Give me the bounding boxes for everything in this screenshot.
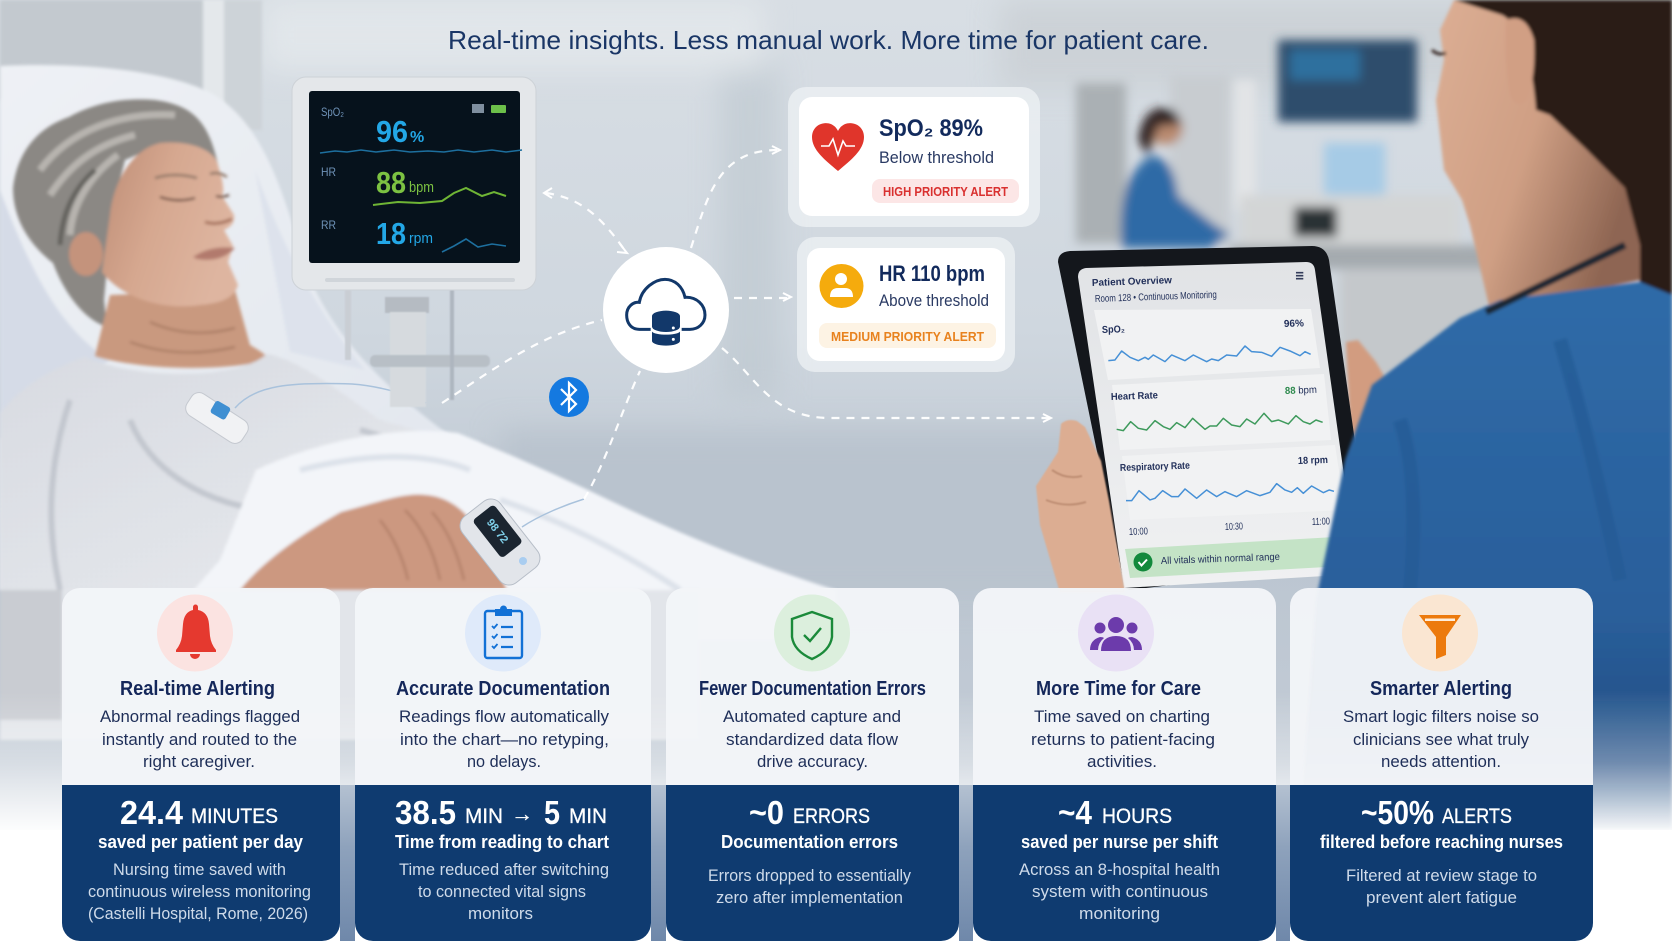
tablet <box>1058 246 1372 590</box>
panel: smarter alerting <box>1290 588 1593 941</box>
tablet labels: Patient Overview <box>1092 275 1172 289</box>
panel: accurate documentation: → <box>511 803 533 826</box>
tablet labels: 10:30 <box>1225 521 1243 533</box>
panel: accurate documentation: Readings flow automatically <box>399 707 609 726</box>
tablet labels: 11:00 <box>1312 516 1330 528</box>
panel: accurate documentation: 38.5 <box>395 794 456 831</box>
monitor readings: SpO₂ <box>321 105 344 119</box>
panel: more time for care: saved per nurse per shift <box>1021 832 1218 852</box>
photo: patient in bed <box>0 65 836 740</box>
icon: red heart with pulse <box>812 123 864 171</box>
panel: more time for care: HOURS <box>1102 805 1172 828</box>
alert card: HR medium priority: HR 110 bpm <box>879 261 985 286</box>
face <box>102 142 238 306</box>
monitor readings: % <box>410 129 424 146</box>
panel: real-time alerting: right caregiver. <box>143 752 255 771</box>
nurse left hand <box>1036 420 1125 593</box>
tablet labels <box>1092 275 1330 572</box>
panel: smarter alerting: filtered before reaching nurses <box>1320 832 1563 852</box>
panel: fewer documentation errors: Errors dropped to essentially <box>708 866 911 885</box>
icon: shield check <box>774 594 850 672</box>
panel: real-time alerting: MINUTES <box>191 805 278 828</box>
panel: more time for care: Time saved on charting <box>1034 707 1210 726</box>
panel: accurate documentation: Accurate Documentation <box>396 678 610 700</box>
bluetooth badge <box>549 377 589 417</box>
hair <box>13 99 218 327</box>
panel: real-time alerting: (Castelli Hospital, Rome, 2026) <box>88 904 308 923</box>
tablet labels: All vitals within normal range <box>1161 552 1280 567</box>
panel: more time for care: ~4 <box>1058 794 1093 831</box>
tablet labels: 88 bpm <box>1285 385 1317 397</box>
tablet labels: 96% <box>1284 318 1304 330</box>
panel: more time for care <box>973 588 1276 941</box>
photo: nurse holding tablet <box>1036 0 1672 830</box>
panel: more time for care: monitoring <box>1079 904 1160 923</box>
panel: more time for care: More Time for Care <box>1036 678 1201 700</box>
panel: more time for care: returns to patient-facing <box>1031 730 1215 749</box>
tablet labels: SpO₂ <box>1102 324 1125 336</box>
tablet labels: Respiratory Rate <box>1120 461 1190 474</box>
panel: real-time alerting: saved per patient per day <box>98 832 303 852</box>
panel: fewer documentation errors: drive accuracy. <box>757 752 868 771</box>
tagline heading: Real-time insights. Less manual work. More time for patient care. <box>448 25 1209 55</box>
ear <box>69 232 103 276</box>
monitor readings: 96 <box>376 114 408 149</box>
nurse right-hand fingers <box>1346 340 1398 460</box>
panel: smarter alerting: prevent alert fatigue <box>1366 888 1517 907</box>
nurse scrubs <box>1300 282 1672 830</box>
panel: fewer documentation errors: Documentation errors <box>721 832 898 852</box>
forearm and hand <box>240 494 507 590</box>
panel: more time for care: activities. <box>1087 752 1157 771</box>
icon: funnel <box>1402 594 1478 672</box>
thin sensor wires <box>235 383 584 527</box>
chest sensor <box>182 389 252 447</box>
panel: real-time alerting: instantly and routed to the <box>102 730 297 749</box>
panel: accurate documentation: 5 <box>544 794 560 831</box>
blurred colleague and ward behind <box>1076 40 1530 380</box>
monitor readings: 18 <box>376 216 406 251</box>
panel: fewer documentation errors: zero after implementation <box>716 888 903 907</box>
panel: smarter alerting: Smarter Alerting <box>1370 678 1512 700</box>
panel: more time for care: system with continuous <box>1032 882 1208 901</box>
alert card: SpO2 high priority: Below threshold <box>879 148 994 167</box>
alert card: HR medium priority <box>797 237 1015 372</box>
gaps between cards <box>340 785 1290 941</box>
monitor readings: bpm <box>409 179 434 196</box>
bottom white fade <box>0 690 1672 835</box>
monitor readings <box>320 104 522 252</box>
panel: accurate documentation: into the chart—no retyping, <box>400 730 609 749</box>
icon: people group <box>1078 594 1154 672</box>
monitor readings: rpm <box>409 230 433 247</box>
alert card: SpO2 high priority: SpO₂ 89% <box>879 115 983 142</box>
tablet labels: 18 rpm <box>1298 455 1328 467</box>
panel: real-time alerting: Nursing time saved with <box>113 860 286 879</box>
panel: real-time alerting: Real-time Alerting <box>120 678 275 700</box>
bedside vital signs monitor <box>292 77 536 407</box>
panel: smarter alerting: ALERTS <box>1442 805 1512 828</box>
icon: clipboard checklist <box>465 594 541 672</box>
panel: fewer documentation errors: Automated capture and <box>723 707 901 726</box>
icon: bell <box>157 594 233 672</box>
tablet chart panels <box>1094 309 1345 520</box>
tablet labels: Heart Rate <box>1111 390 1158 403</box>
tablet labels: Room 128 • Continuous Monitoring <box>1095 290 1217 305</box>
panel: accurate documentation: MIN <box>465 805 503 828</box>
panel: real-time alerting: Abnormal readings flagged <box>100 707 300 726</box>
alert card: SpO2 high priority: HIGH PRIORITY ALERT <box>883 184 1008 199</box>
panel: accurate documentation: Time from reading to chart <box>395 832 609 852</box>
panel: real-time alerting: continuous wireless monitoring <box>88 882 311 901</box>
monitor readings: 88 <box>376 165 406 200</box>
tablet labels: 10:00 <box>1129 526 1148 538</box>
blanket <box>150 431 836 640</box>
finger pulse oximeter <box>455 494 545 590</box>
panel: accurate documentation: Time reduced after switching <box>399 860 609 879</box>
panel: fewer documentation errors <box>666 588 959 941</box>
icon: amber person <box>820 264 864 308</box>
panel: fewer documentation errors: ~0 <box>749 794 784 831</box>
panel: real-time alerting: 24.4 <box>120 794 184 831</box>
panel: accurate documentation: MIN <box>569 805 607 828</box>
panel: accurate documentation: to connected vital signs <box>418 882 586 901</box>
panel: fewer documentation errors: standardized data flow <box>726 730 899 749</box>
alert card: SpO2 high priority <box>788 87 1040 227</box>
panel: smarter alerting: Filtered at review stage to <box>1346 866 1537 885</box>
panel: more time for care: Across an 8-hospital health <box>1019 860 1220 879</box>
alert card: HR medium priority: Above threshold <box>879 291 989 310</box>
panel: smarter alerting: needs attention. <box>1381 752 1501 771</box>
panel: real-time alerting <box>62 588 340 941</box>
neck <box>95 290 270 368</box>
panel: smarter alerting: ~50% <box>1361 794 1434 831</box>
panel: accurate documentation: monitors <box>468 904 533 923</box>
monitor readings: HR <box>321 165 336 179</box>
panel: accurate documentation <box>355 588 651 941</box>
tablet vital trend lines <box>1108 273 1334 501</box>
nurse hair <box>1454 0 1672 310</box>
alert card: HR medium priority: MEDIUM PRIORITY ALERT <box>831 329 984 344</box>
panel: fewer documentation errors: Fewer Documentation Errors <box>699 678 926 700</box>
cloud data hub <box>603 247 729 373</box>
panel: fewer documentation errors: ERRORS <box>793 805 870 828</box>
panel: smarter alerting: Smart logic filters noise so <box>1343 707 1539 726</box>
data flow dashed arrows <box>442 146 1051 499</box>
finger pulse oximeter: 98 72 <box>484 517 510 546</box>
gown <box>0 354 520 590</box>
monitor readings: RR <box>321 218 336 232</box>
nurse face and neck <box>1436 0 1640 310</box>
panel: smarter alerting: clinicians see what truly <box>1353 730 1529 749</box>
panel: accurate documentation: no delays. <box>467 752 541 771</box>
